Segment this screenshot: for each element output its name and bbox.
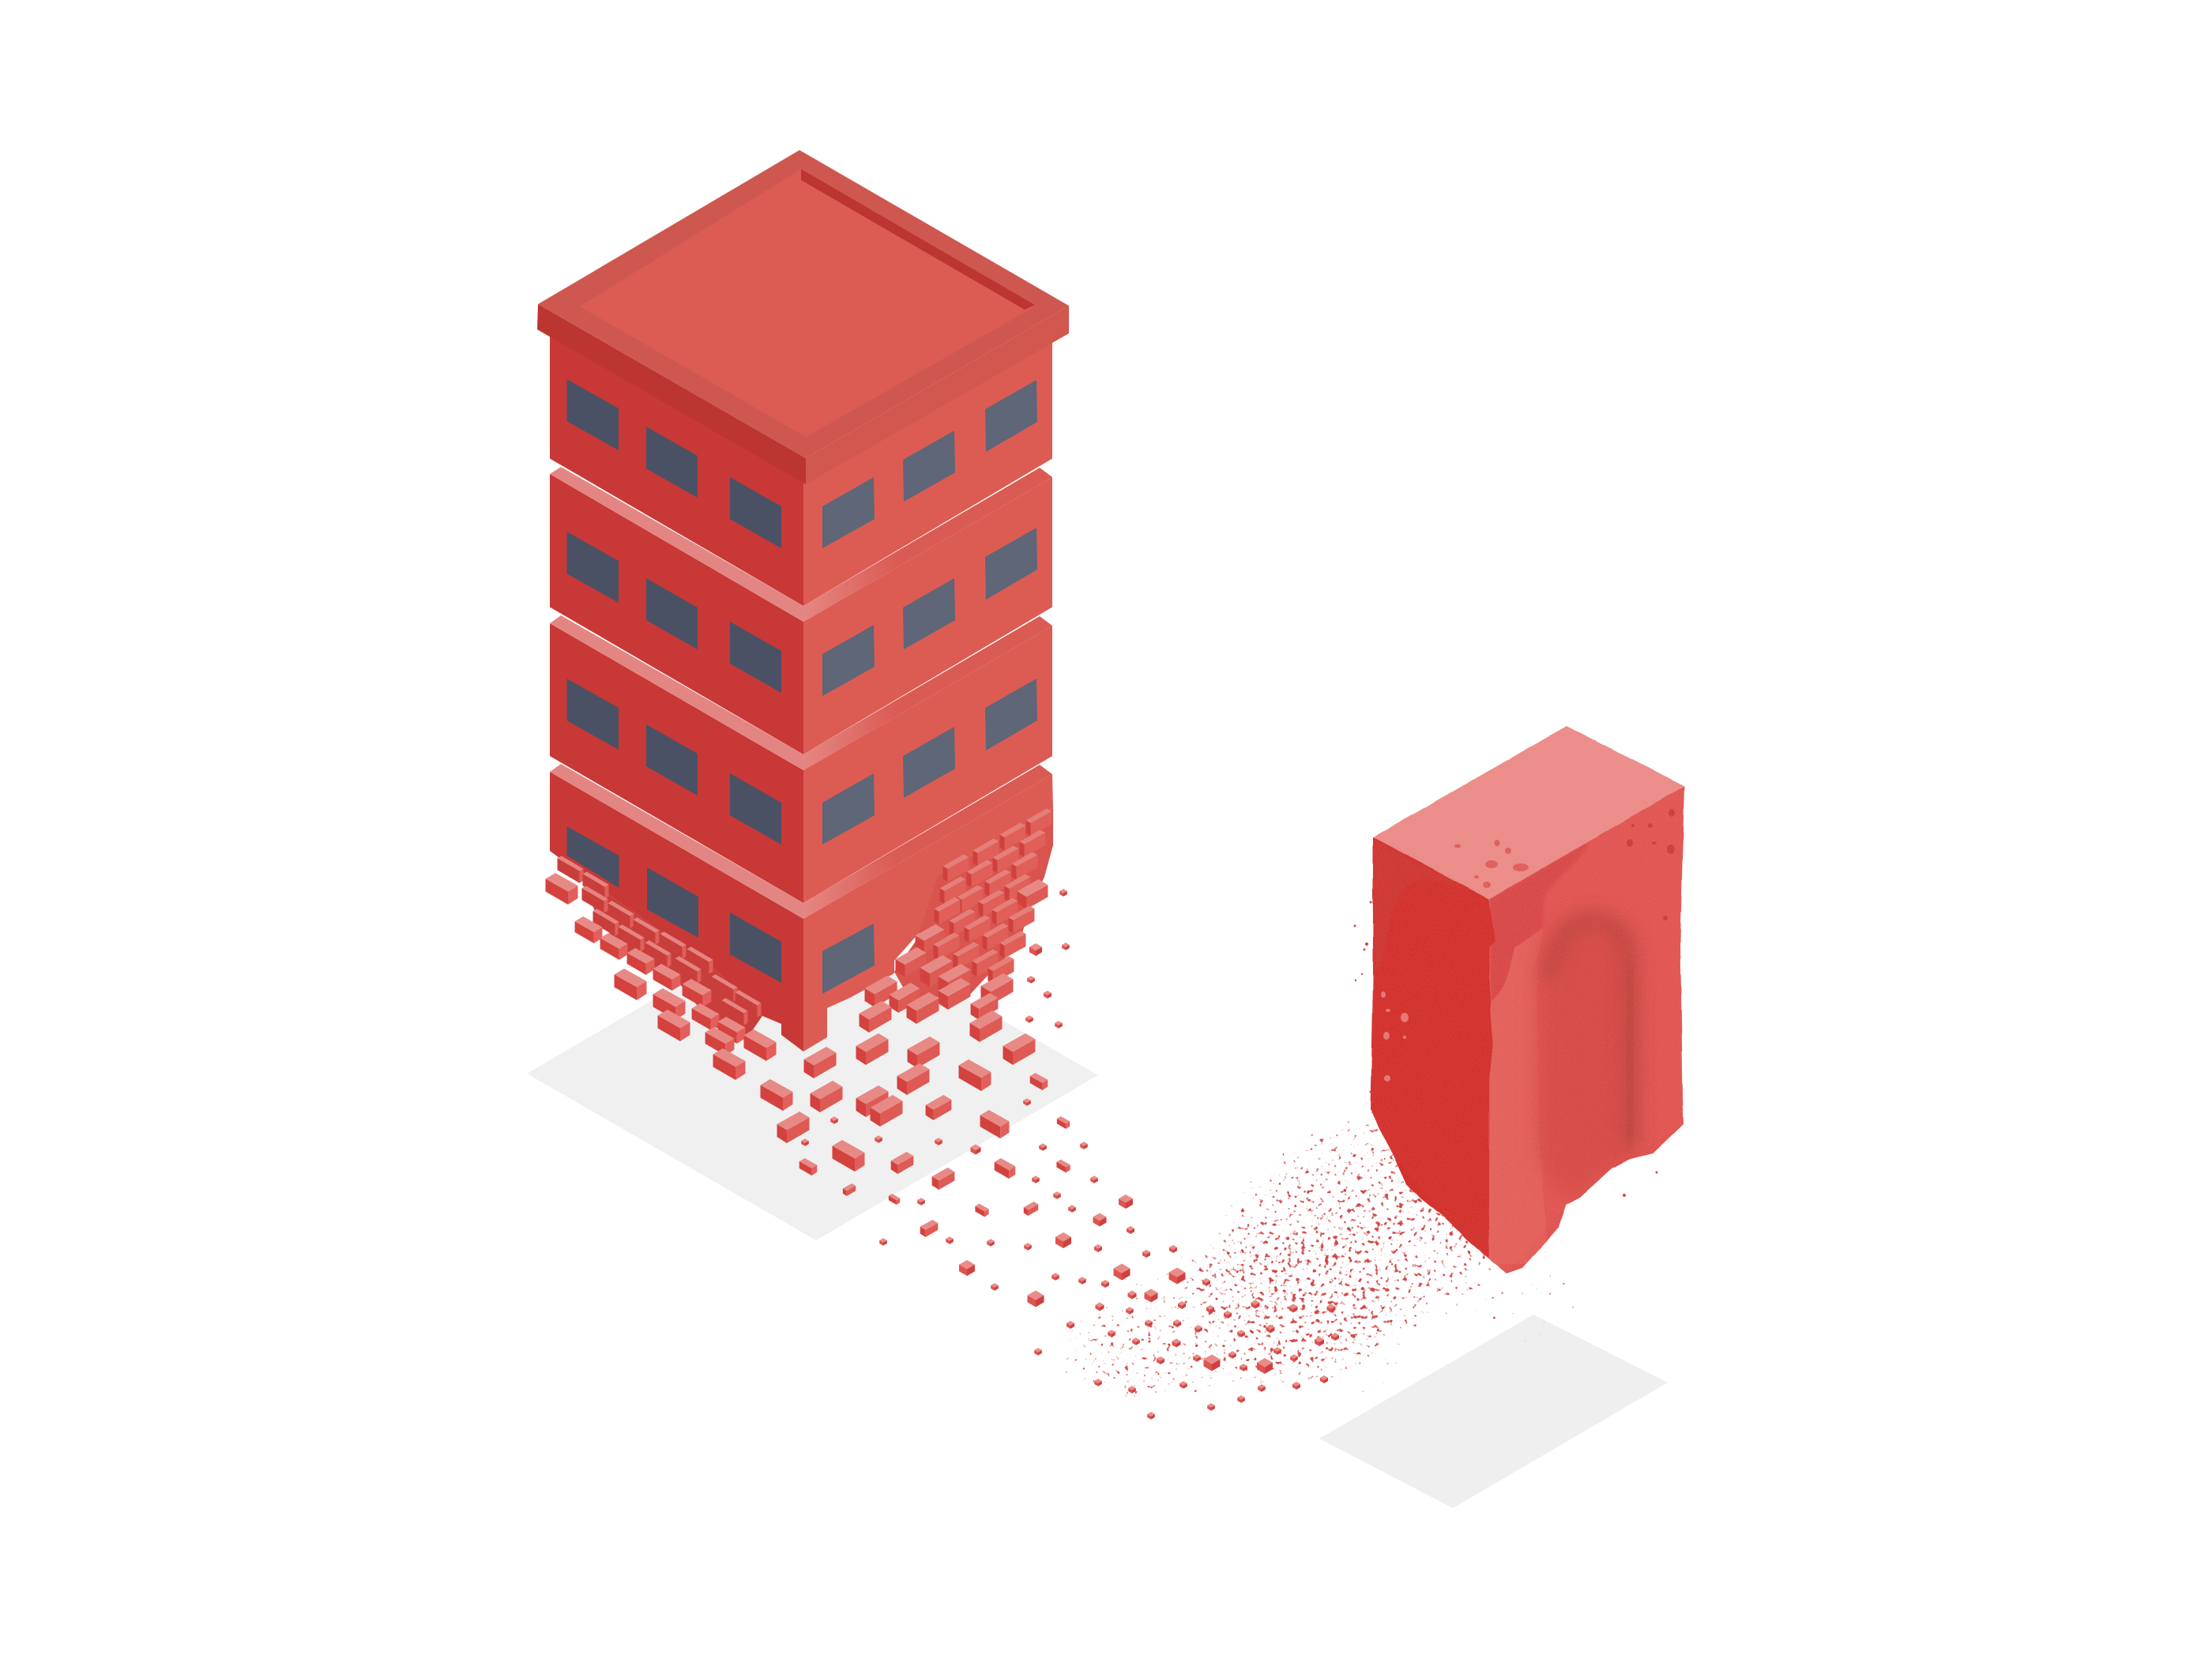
left face dark smudge [1375, 841, 1489, 968]
red clay brick [1354, 726, 1684, 1273]
floor 1 [550, 316, 1052, 606]
scattered small cubes [801, 889, 1339, 1420]
right wall bricks [860, 808, 1053, 1042]
ground shadow under building [527, 908, 1098, 1240]
ground shadow under brick [1319, 1315, 1668, 1508]
left wall bricks [545, 856, 776, 1080]
brick left face [1371, 837, 1495, 1258]
dust cloud [1014, 1014, 1651, 1451]
brick spots [1381, 809, 1675, 1082]
floor 2 [550, 467, 1052, 754]
building [537, 150, 1069, 1051]
floor 3 [550, 615, 1052, 903]
brick right face [1489, 786, 1684, 1273]
brick grain [1371, 726, 1684, 1273]
floor 4 crumbling [550, 764, 1053, 1051]
stray specks left of brick [1354, 901, 1657, 1197]
falling loose bricks [760, 1033, 1070, 1237]
brick top face [1373, 726, 1684, 899]
right face stain, light strip and arch shadow [1489, 841, 1633, 1264]
roof [537, 150, 1069, 484]
illustration: building dissolving into a single brick [528, 150, 1684, 1508]
